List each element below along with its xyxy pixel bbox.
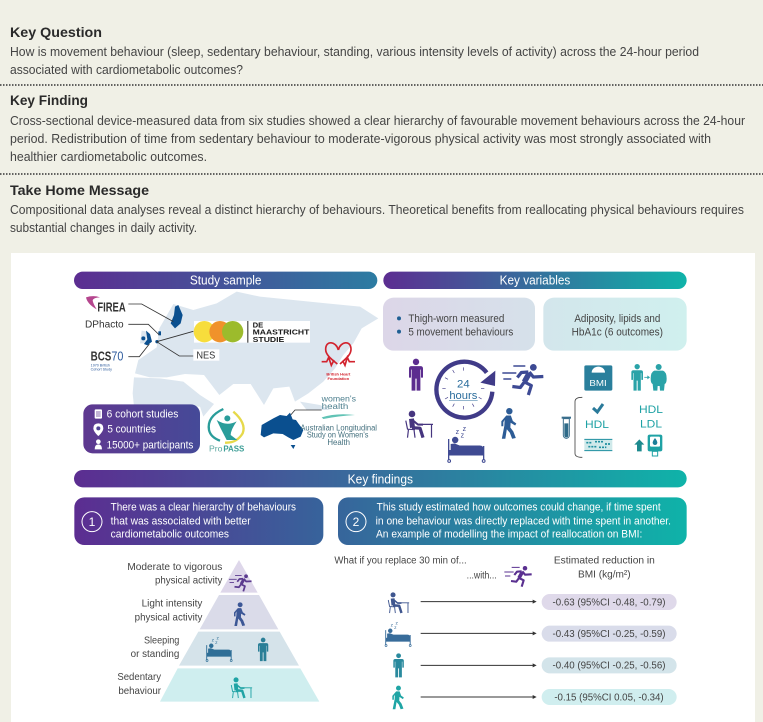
row: standing <box>393 653 677 677</box>
pyramid labels: Sleeping <box>144 636 180 647</box>
logo: British Heart Foundation: Foundation <box>327 376 350 381</box>
logo: De Maastricht Studie: DE <box>253 320 263 329</box>
row: sleeping: -0.43 (95%CI -0.25, -0.59) <box>552 629 665 640</box>
heading bar: key findings <box>74 470 687 487</box>
panel: key findings right <box>334 497 687 709</box>
icon: pyramid sleeping <box>206 636 232 661</box>
callout 1 <box>74 497 323 545</box>
column heading: estimated reduction <box>554 555 655 580</box>
icon: 24 hour clock <box>436 362 495 418</box>
logo: BCS70: 70 <box>111 349 123 364</box>
logo: De Maastricht Studie: MAASTRICHT <box>253 328 310 337</box>
label: what if you replace: What if you replace 30 min of... <box>334 555 467 566</box>
icon: 24 hour clock: hours <box>449 390 478 402</box>
text block: take home message: substantial changes in daily activity. <box>10 221 197 235</box>
callout 2: 2 <box>353 515 360 529</box>
box: measures: 5 movement behaviours <box>408 326 514 338</box>
logo: ProPASS: Pro <box>209 444 223 454</box>
box: outcomes <box>543 298 687 351</box>
row: sedentary <box>388 592 677 613</box>
logo: ProPASS: PASS <box>223 444 245 454</box>
logo: British Heart Foundation: British Heart <box>326 371 351 376</box>
connector lines <box>128 304 322 427</box>
icon: pyramid walking <box>234 602 245 626</box>
label: NES: NES <box>196 350 215 361</box>
pyramid labels: physical activity <box>155 576 223 587</box>
tier: sleeping or standing <box>179 632 299 666</box>
label: Australian Longitudinal Study on Women's Health <box>300 423 377 447</box>
icon: walking <box>501 408 516 439</box>
icon: pyramid sitting <box>231 677 252 698</box>
icon: check mark <box>593 404 603 412</box>
heading: key variables: Key variables <box>500 272 571 287</box>
text block: key finding: healthier cardiometabolic outcomes. <box>10 150 207 164</box>
logo: FIREA: FIREA <box>97 300 126 315</box>
box: measures <box>383 298 535 351</box>
column heading: estimated reduction: Estimated reduction in <box>554 555 655 566</box>
callout 2: in one behaviour was directly replaced with time spent in another. <box>376 515 671 527</box>
icon: BMI scale <box>584 365 612 391</box>
logo: women's health: health <box>322 401 349 411</box>
panel: key findings left <box>74 470 687 702</box>
callout: study statistics <box>83 404 200 453</box>
icon: 24 hour clock: 24 <box>457 378 470 390</box>
pyramid labels: physical activity <box>135 612 203 623</box>
text block: key question <box>10 24 699 77</box>
callout 1: There was a clear hierarchy of behaviours <box>111 502 296 514</box>
logo: British Heart Foundation <box>322 343 355 381</box>
label: HDL: HDL <box>585 419 609 431</box>
row: sleeping <box>385 621 677 646</box>
icon: blood test tube <box>562 417 571 438</box>
text block: key finding: period. Redistribution of time from sedentary behaviour to moderate-vigorous physical activity was most strongly associated with <box>10 132 711 146</box>
heading bar: key findings: Key findings <box>348 471 413 486</box>
pyramid labels: Light intensity <box>142 599 203 610</box>
callout: study statistics: 15000+ participants <box>107 439 194 451</box>
logo: FIREA <box>86 296 126 315</box>
country highlights: Finland, UK, Denmark, Netherlands <box>141 305 183 345</box>
row: standing: -0.40 (95%CI -0.25, -0.56) <box>552 661 665 672</box>
box: outcomes: HbA1c (6 outcomes) <box>572 326 663 338</box>
bracket <box>575 397 582 457</box>
heading: study sample <box>74 272 377 289</box>
logo: BCS70: BCS <box>91 349 111 364</box>
heading: study sample: Study sample <box>190 272 261 287</box>
text block: take home message: Take Home Message <box>10 182 149 198</box>
world map <box>133 292 378 417</box>
label: Australian Longitudinal Study on Women's Health: Australian Longitudinal <box>300 423 377 432</box>
icon: standing <box>409 359 423 391</box>
panel: graphical abstract <box>11 253 755 722</box>
pyramid labels <box>117 562 223 697</box>
pyramid labels: Moderate to vigorous <box>127 562 222 573</box>
pyramid <box>160 560 319 702</box>
logo: BCS70: Cohort Study <box>91 368 112 372</box>
icon: BMI scale: BMI <box>589 378 607 388</box>
logo: women's health: women's <box>321 394 356 404</box>
tier: light intensity <box>200 595 278 629</box>
box: measures: Thigh-worn measured <box>408 313 504 325</box>
label: with: ...with... <box>467 570 497 581</box>
icon: up arrow <box>634 439 644 451</box>
callout 2: This study estimated how outcomes could change, if time spent <box>377 502 661 514</box>
icon: glucose meter <box>648 435 662 456</box>
panel: study sample <box>74 272 378 454</box>
icon: replacement running <box>504 566 532 587</box>
label: Australian Longitudinal Study on Women's Health: Study on Women's <box>307 431 368 440</box>
heading: key variables <box>383 272 687 289</box>
icon: pyramid standing <box>258 638 268 661</box>
logo: De Maastricht Studie <box>194 320 310 344</box>
icon: weight gain <box>631 364 667 391</box>
callout 1: 1 <box>89 515 96 529</box>
logo: BCS70 <box>91 349 123 372</box>
label: HDL and LDL: LDL <box>640 419 662 431</box>
label: Australian Longitudinal Study on Women's Health: Health <box>327 438 350 447</box>
callout 2: An example of modelling the impact of reallocation on BMI: <box>376 529 642 541</box>
icon: artery <box>584 439 612 451</box>
text block: key finding: Cross-sectional device-measured data from six studies showed a clear hierarchy of favourable movement behaviours across the 24-hour <box>10 114 745 128</box>
pyramid labels: or standing <box>131 649 180 660</box>
icon: running <box>502 364 543 395</box>
label: DPhacto: DPhacto <box>85 320 124 331</box>
icon: pyramid running <box>229 574 252 591</box>
row: light activity: -0.15 (95%CI 0.05, -0.34) <box>554 692 664 703</box>
panel: key variables <box>383 272 687 462</box>
box: outcomes: Adiposity, lipids and <box>574 313 660 325</box>
pyramid labels: Sedentary <box>117 672 162 683</box>
row: light activity <box>392 686 677 709</box>
text block: key question: How is movement behaviour (sleep, sedentary behaviour, standing, various intensity levels of activity) across the 24-hour period <box>10 45 699 59</box>
logo: De Maastricht Studie: STUDIE <box>253 335 284 344</box>
icon: sleeping <box>448 426 485 462</box>
tier: sedentary <box>160 668 319 702</box>
callout: study statistics: 6 cohort studies <box>107 408 179 420</box>
callout: study statistics: 5 countries <box>107 424 156 436</box>
logo: women's health <box>321 394 356 419</box>
callout 2 <box>338 497 687 545</box>
text block: key finding: Key Finding <box>10 92 88 108</box>
column heading: estimated reduction: BMI (kg/m²) <box>578 569 631 580</box>
pyramid labels: behaviour <box>118 686 162 697</box>
text block: key question: Key Question <box>10 24 102 40</box>
text block: take home message: Compositional data analyses reveal a distinct hierarchy of behaviours. Theoretical benefits from reallocating physical behaviours requires <box>10 203 744 217</box>
logo: ProPASS <box>209 409 245 454</box>
text block: take home message <box>10 182 744 235</box>
row: sedentary: -0.63 (95%CI -0.48, -0.79) <box>552 597 665 608</box>
text block: key question: associated with cardiometabolic outcomes? <box>10 63 243 77</box>
label: HDL and LDL <box>639 404 663 431</box>
label: HDL and LDL: HDL <box>639 404 663 416</box>
tier: moderate to vigorous <box>220 560 258 593</box>
callout 1: that was associated with better <box>111 515 251 527</box>
icon: sitting <box>406 411 433 438</box>
logo: BCS70: 1970 British <box>91 364 110 368</box>
map: Australia <box>261 413 303 449</box>
callout 1: cardiometabolic outcomes <box>111 529 229 541</box>
text block: key finding <box>10 92 745 164</box>
